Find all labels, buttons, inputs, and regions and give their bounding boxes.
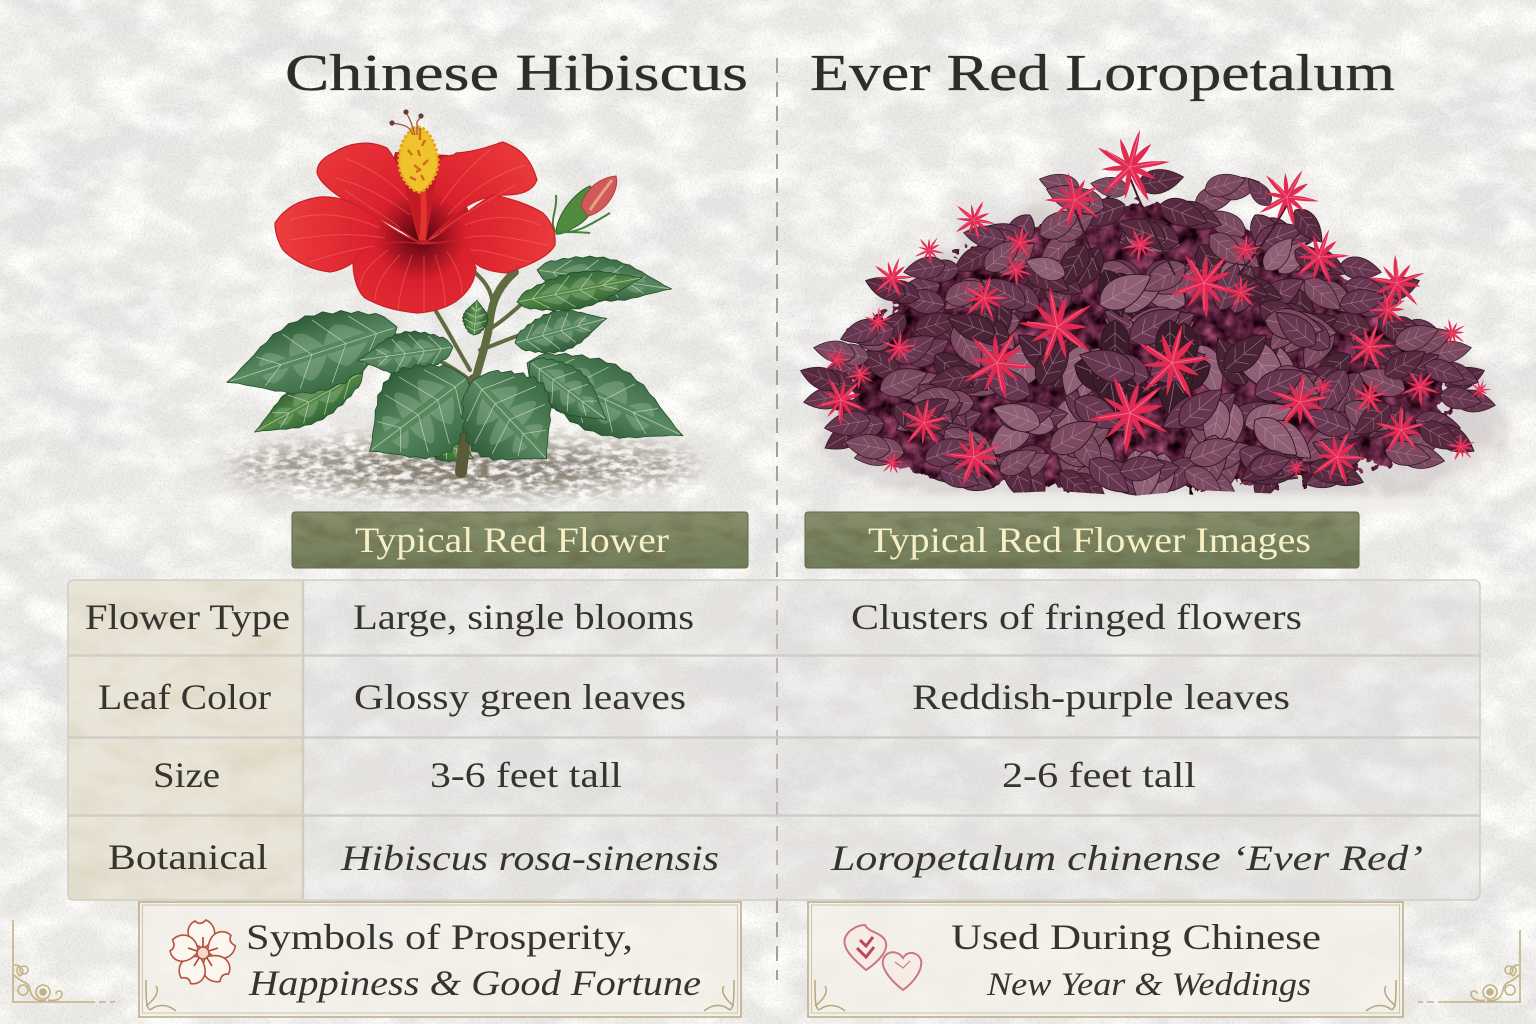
row: Leaf Color: Leaf Color <box>98 677 271 717</box>
row: Flower Type: Flower Type <box>85 597 290 637</box>
row: Botanical: Loropetalum chinense ‘Ever Red’ <box>830 838 1423 878</box>
label: Typical Red Flower <box>292 512 748 568</box>
row: Flower Type <box>85 597 1302 637</box>
callout: prosperity <box>139 902 741 1017</box>
petal veins <box>290 150 548 312</box>
leaves behind <box>244 248 675 474</box>
row: Botanical: Botanical <box>108 837 268 877</box>
center dashed divider <box>776 58 778 980</box>
callout frame <box>808 902 1403 1017</box>
table panel <box>68 580 1480 900</box>
icon: flower outline <box>167 920 238 988</box>
row: Botanical <box>108 837 1423 878</box>
row: Leaf Color: Reddish-purple leaves <box>912 677 1290 717</box>
row: Leaf Color: Glossy green leaves <box>354 677 686 717</box>
label: Typical Red Flower Images <box>805 512 1359 568</box>
label: Typical Red Flower Images: Typical Red Flower Images <box>868 520 1311 560</box>
row: Size: Size <box>153 755 220 795</box>
callout text: Used During Chinese <box>951 917 1321 957</box>
illustration: hibiscus plant <box>215 109 700 494</box>
row: Flower Type: Clusters of fringed flowers <box>851 597 1302 637</box>
title: Ever Red Loropetalum: Ever Red Loropetalum <box>810 45 1395 102</box>
callout text <box>951 917 1321 1003</box>
leaves front <box>215 259 698 493</box>
corner ornament: bottom right <box>1418 930 1520 1002</box>
title: Chinese Hibiscus: Chinese Hibiscus <box>285 45 748 102</box>
pistil and stamen <box>389 109 438 240</box>
callout frame <box>139 902 741 1017</box>
callout text: Symbols of Prosperity, <box>246 917 633 957</box>
watercolor wash around shrub <box>815 198 1510 517</box>
shrub leaves <box>797 169 1497 510</box>
illustration: loropetalum shrub <box>797 120 1510 517</box>
icon: two hearts <box>844 925 921 990</box>
row: Botanical: Hibiscus rosa-sinensis <box>340 838 719 878</box>
callout text: New Year & Weddings <box>986 967 1311 1003</box>
row: Size: 3-6 feet tall <box>430 755 622 795</box>
comparison table <box>68 580 1480 900</box>
corner ornament: bottom left <box>13 920 115 1002</box>
callout text: Happiness & Good Fortune <box>248 963 701 1003</box>
row: Flower Type: Large, single blooms <box>353 597 694 637</box>
row: Leaf Color <box>98 677 1290 717</box>
stem and branches <box>410 268 532 472</box>
callout: new year and weddings <box>808 902 1403 1017</box>
flower petals <box>275 142 555 313</box>
label: Typical Red Flower: Typical Red Flower <box>355 520 669 560</box>
shrub flowers <box>806 120 1494 496</box>
row: Size <box>153 755 1196 795</box>
top stems and leaves <box>1075 165 1330 275</box>
row: Size: 2-6 feet tall <box>1002 755 1196 795</box>
callout text <box>246 917 701 1003</box>
shrub foliage mass <box>840 205 1446 486</box>
ground shadow <box>230 438 700 494</box>
bud <box>553 176 617 234</box>
